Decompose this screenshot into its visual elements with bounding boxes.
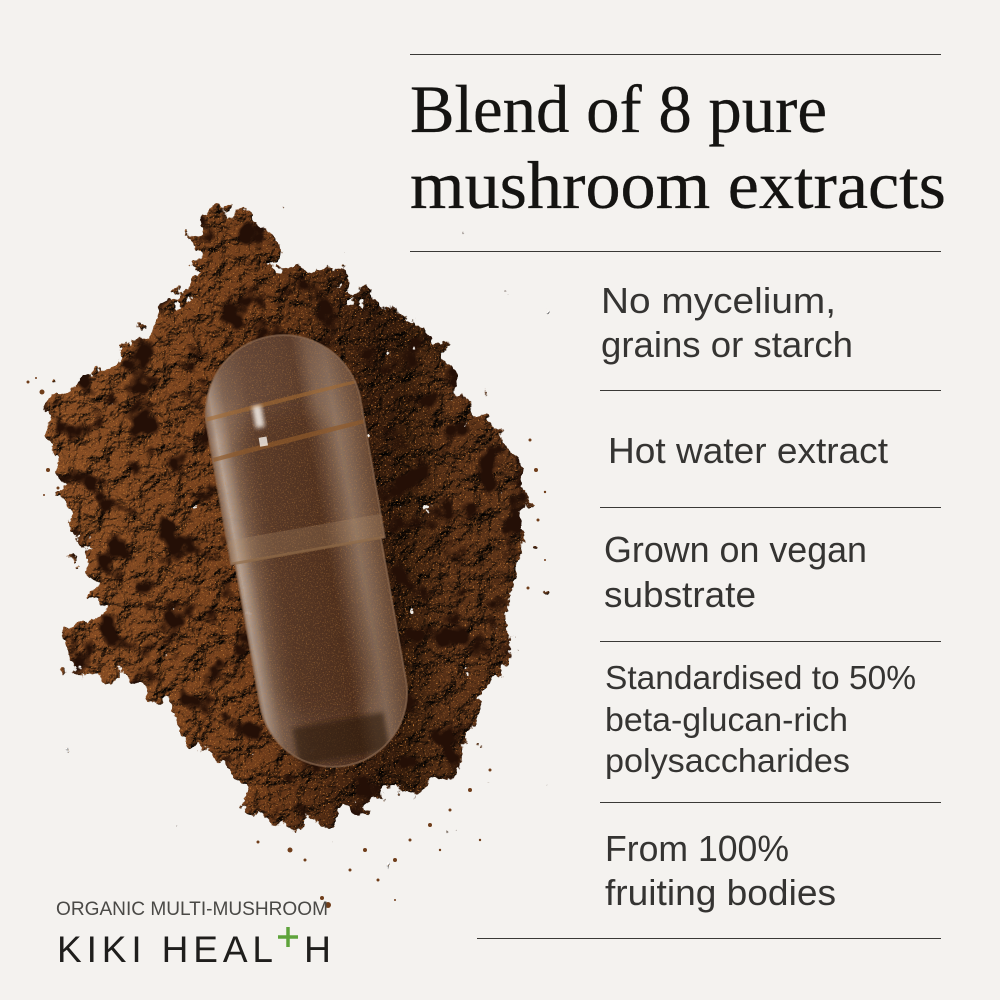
feature: standardised (605, 659, 916, 779)
brand logo (56, 898, 331, 970)
title: Blend of 8 pure (410, 71, 827, 147)
capsule (204, 334, 408, 768)
brand logo: H (304, 929, 331, 970)
powder mass (48, 208, 526, 830)
rule top (410, 54, 941, 56)
brand name: KIKI HEAL (57, 929, 273, 970)
feature: no mycelium (601, 280, 853, 365)
feature: no mycelium: grains or starch (601, 324, 853, 365)
feature: hot water: Hot water extract (608, 430, 888, 471)
title: mushroom extracts (410, 147, 946, 223)
feature: vegan substrate: Grown on vegan (604, 529, 867, 570)
green plus (278, 927, 298, 947)
feature: fruiting bodies: From 100% (605, 828, 789, 869)
feature: fruiting bodies: fruiting bodies (605, 872, 836, 913)
capsule body (206, 335, 407, 767)
feature: vegan substrate: substrate (604, 574, 756, 615)
title (410, 71, 946, 223)
rule under title (410, 250, 941, 252)
feature: standardised: polysaccharides (605, 742, 850, 779)
capsule outline (193, 323, 423, 779)
feature: no mycelium: No mycelium, (601, 280, 836, 321)
powder pile (26, 208, 546, 908)
feature: fruiting bodies (605, 828, 836, 913)
scattered dust (26, 377, 546, 908)
feature: standardised: Standardised to 50% (605, 659, 916, 696)
product name: ORGANIC MULTI-MUSHROOM (56, 898, 328, 920)
feature: vegan substrate (604, 529, 867, 615)
feature: standardised: beta-glucan-rich (605, 701, 848, 738)
